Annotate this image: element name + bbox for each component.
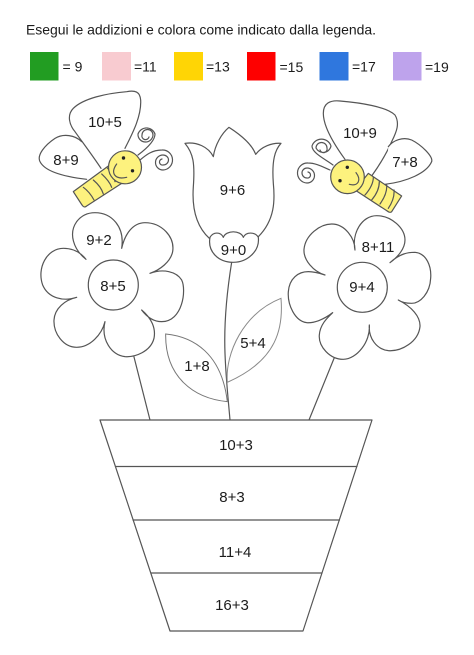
tulip calyx 9+0: 9+0 [221, 242, 246, 259]
label 10+3: 10+3 [219, 437, 253, 454]
band lines [116, 466, 357, 573]
legend item: blue 17: =17 [352, 58, 376, 74]
label 16+3: 16+3 [215, 597, 249, 614]
stem [134, 357, 150, 420]
tulip petal 9+6: 9+6 [220, 182, 245, 199]
tulip calyx 9+0 [210, 232, 258, 262]
tulip petal 9+6 [185, 127, 281, 238]
legend item: yellow 13: =13 [206, 58, 230, 74]
legend item: purple 19: =19 [425, 59, 449, 75]
legend item: pink 11: =11 [134, 58, 157, 74]
stripes [365, 177, 394, 208]
pot [100, 420, 372, 631]
face [114, 156, 134, 178]
label 8+11: 8+11 [362, 239, 394, 256]
petals [41, 213, 184, 357]
antennae [297, 139, 333, 183]
stripes [83, 168, 115, 200]
lower wing 8+9: 8+9 [53, 152, 79, 169]
butterfly right [297, 101, 432, 212]
leaf 1+8 [166, 334, 227, 402]
label 9+4: 9+4 [349, 279, 375, 296]
label 11+4: 11+4 [219, 544, 251, 561]
leaf 1+8: 1+8 [184, 358, 210, 375]
flower left [41, 213, 184, 420]
legend item: green 9 [30, 52, 83, 80]
legend item: purple 19 [393, 52, 449, 80]
antennae [138, 128, 173, 170]
stem [225, 262, 232, 420]
body [73, 166, 122, 207]
flower right [288, 216, 431, 420]
center [337, 262, 387, 312]
upper wing 10+9: 10+9 [343, 125, 377, 142]
legend item: pink 11 [102, 52, 157, 80]
head [331, 160, 364, 194]
legend [30, 52, 449, 80]
petals [288, 216, 431, 359]
title: Esegui le addizioni e colora come indicato dalla legenda. [26, 22, 376, 38]
leaf 5+4: 5+4 [240, 335, 266, 352]
center [88, 260, 138, 310]
legend item: blue 17 [320, 52, 376, 80]
body [355, 173, 402, 212]
label 8+3: 8+3 [219, 489, 245, 506]
tulip [166, 127, 281, 420]
legend item: red 15 [247, 52, 303, 80]
legend item: yellow 13 [174, 52, 230, 80]
legend item: green 9: = 9 [62, 58, 83, 74]
head [108, 151, 142, 184]
legend item: red 15: =15 [280, 59, 303, 75]
pot outline [100, 420, 372, 631]
lower wing 7+8: 7+8 [392, 154, 418, 171]
label 9+2: 9+2 [86, 232, 112, 249]
label 8+5: 8+5 [100, 278, 126, 295]
stem [309, 356, 335, 420]
upper wing 10+5: 10+5 [88, 114, 122, 131]
leaf 5+4 [227, 298, 281, 382]
butterfly left [39, 91, 173, 207]
face [338, 166, 359, 185]
